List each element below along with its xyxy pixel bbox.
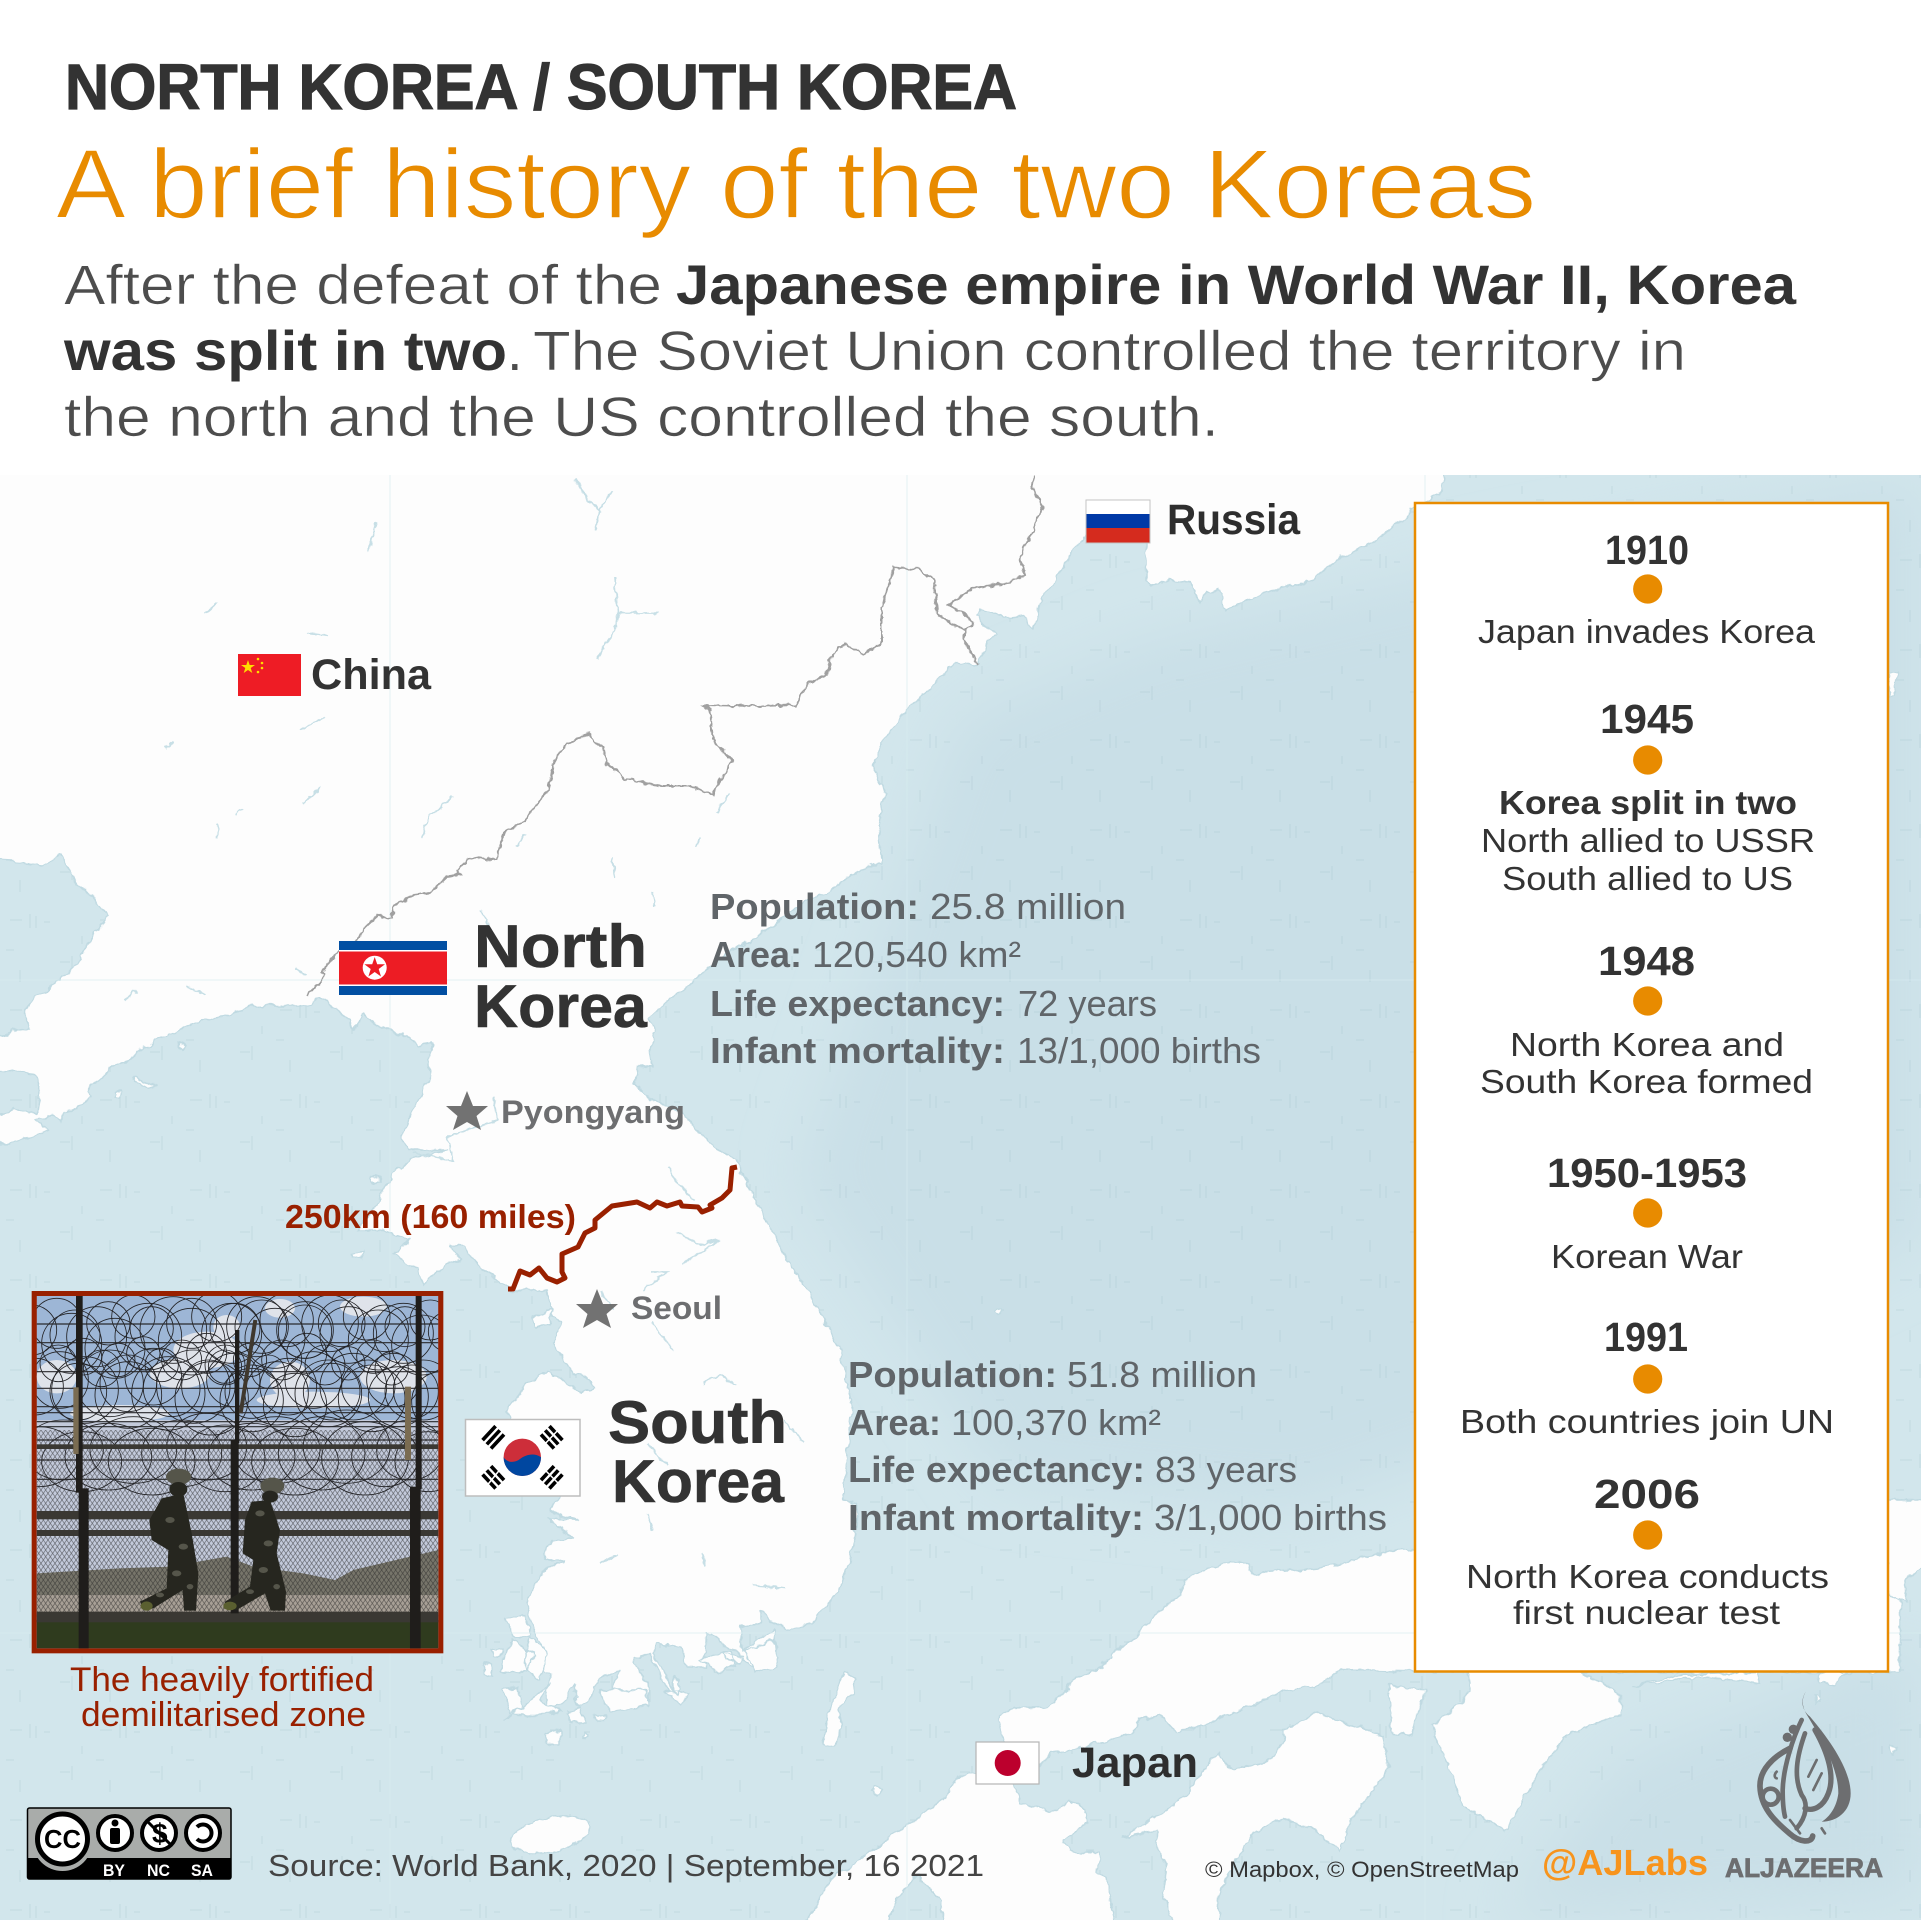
North Korea label group (339, 913, 648, 1040)
sea (0, 475, 1921, 1920)
event: 1948 (1480, 938, 1813, 1100)
North Korea statistics: Area: (710, 934, 802, 975)
event: 1945: North allied to USSR (1481, 822, 1815, 859)
event: 1945: South allied to US (1502, 860, 1793, 897)
icon: Al Jazeera emblem (1760, 1691, 1851, 1841)
South Korea statistics (848, 1354, 1387, 1538)
label: South Korea (608, 1389, 787, 1515)
South Korea statistics: Population: (848, 1354, 1057, 1395)
event: 1910: 1910 (1605, 527, 1689, 573)
panel: timeline (1415, 503, 1888, 1672)
label: North Korea (474, 913, 648, 1040)
land: Tsushima (823, 1672, 855, 1747)
label: Russia: Russia (1167, 496, 1301, 544)
icon: Creative Commons badge: NC (147, 1861, 170, 1880)
South Korea statistics: Infant mortality: (848, 1497, 1144, 1538)
event: 1950-1953 (1547, 1150, 1747, 1275)
line: demilitarised zone (508, 1167, 737, 1289)
icon: star (576, 1289, 618, 1328)
intro paragraph: the north and the US controlled the south. (64, 385, 1219, 448)
label: Japan: Japan (1072, 1739, 1198, 1787)
land masses (0, 460, 1921, 1920)
event: 2006: 2006 (1594, 1471, 1700, 1517)
South Korea statistics: Life expectancy: (848, 1449, 1145, 1490)
label: China: China (311, 651, 432, 699)
South Korea statistics: 3/1,000 births (1154, 1497, 1387, 1538)
icon: Creative Commons badge: BY (103, 1861, 126, 1880)
event: 1948: 1948 (1598, 938, 1695, 984)
North Korea statistics: Population: (710, 886, 919, 927)
event: 1991: 1991 (1604, 1314, 1688, 1360)
event: 2006: North Korea conducts (1466, 1558, 1829, 1595)
deep sea shading (852, 620, 1414, 1466)
figure: first soldier (140, 1469, 198, 1611)
land: Kii island edges and right strip (1389, 672, 1921, 1735)
intro paragraph: The Soviet Union controlled the territory in (533, 319, 1686, 382)
label: Pyongyang: Pyongyang (501, 1094, 685, 1130)
Japan flag and label (976, 1739, 1198, 1787)
DMZ line and length (285, 1167, 737, 1289)
event: 1950-1953: Korean War (1551, 1238, 1743, 1275)
header: title and introduction (56, 51, 1797, 448)
event: 2006 (1466, 1471, 1829, 1631)
intro paragraph: was split in two (63, 319, 507, 382)
North Korea statistics: 13/1,000 births (1017, 1030, 1261, 1071)
land: mainland Asia and Korean peninsula (0, 460, 1448, 1710)
icon: Creative Commons badge: CC (44, 1824, 81, 1854)
photo caption: demilitarised zone (81, 1696, 366, 1734)
label: South Korea: South (608, 1389, 787, 1456)
event: 1950-1953: 1950-1953 (1547, 1150, 1747, 1196)
event: 1945 (1481, 696, 1815, 897)
land: Japan, Honshu (998, 1500, 1900, 1830)
South Korea statistics: 100,370 km² (951, 1402, 1161, 1443)
land: Japan, Shikoku (1122, 1713, 1389, 1920)
event: 1945: 1945 (1600, 696, 1694, 742)
South Korea label group (466, 1389, 787, 1515)
photo caption (70, 1661, 374, 1734)
land: Japan, Kyushu (796, 1772, 1117, 1920)
Russia flag and label (1086, 496, 1301, 544)
event: 1948: South Korea formed (1480, 1063, 1813, 1100)
event: 1948: North Korea and (1510, 1026, 1784, 1063)
event: 1910 (1478, 527, 1816, 650)
border: China and Russia (949, 476, 1043, 630)
land: Jeju island (510, 1815, 590, 1854)
label: Seoul: Seoul (631, 1290, 722, 1326)
map attribution: © Mapbox, © OpenStreetMap (1205, 1857, 1519, 1882)
national borders (308, 476, 1043, 997)
Pyongyang marker (446, 1091, 685, 1130)
figure: second soldier (223, 1478, 286, 1611)
source line: Source: World Bank, 2020 | September, 16 2021 (268, 1848, 984, 1883)
label: North Korea: North (474, 913, 647, 980)
sea texture (0, 475, 1921, 1920)
photo caption: The heavily fortified (70, 1661, 374, 1699)
wordmark: Al Jazeera: ALJAZEERA (1725, 1853, 1883, 1883)
South Korea statistics: 51.8 million (1067, 1354, 1257, 1395)
North Korea statistics: Infant mortality: (710, 1030, 1005, 1071)
icon: star (446, 1091, 488, 1130)
deep sea shading, pacific (1600, 1704, 1884, 1874)
flag: South Korea (466, 1420, 580, 1496)
title: kicker: NORTH KOREA / SOUTH KOREA (65, 51, 1017, 123)
North Korea statistics (710, 886, 1261, 1071)
title: main headline: A brief history of the two Koreas (56, 129, 1536, 239)
intro paragraph: After the defeat of the (64, 253, 662, 316)
flag: North Korea (339, 941, 447, 995)
label: North Korea: Korea (474, 973, 648, 1040)
North Korea statistics: 72 years (1018, 983, 1157, 1024)
China flag and label (238, 651, 432, 699)
event: 1991: Both countries join UN (1460, 1403, 1834, 1440)
land: scattered small islands (113, 1043, 1898, 1796)
North Korea statistics: Life expectancy: (710, 983, 1005, 1024)
land: southwest Korean islands (483, 1615, 777, 1745)
Seoul marker (576, 1289, 722, 1328)
graticule lines (0, 475, 1921, 1920)
border: North Korea with China and Russia (308, 567, 978, 997)
flag: Japan (976, 1742, 1039, 1784)
logo: Al Jazeera (1725, 1691, 1883, 1883)
social handle: @AJLabs (1542, 1842, 1708, 1883)
event: 1991 (1460, 1314, 1834, 1440)
icon: Creative Commons badge (28, 1808, 231, 1880)
flag: China (238, 654, 301, 696)
event: 2006: first nuclear test (1513, 1594, 1780, 1631)
event: 1910: Japan invades Korea (1478, 613, 1816, 650)
intro paragraph: Japanese empire in World War II, Korea (676, 253, 1797, 316)
North Korea statistics: 120,540 km² (812, 934, 1021, 975)
rivers and lakes (125, 478, 805, 1588)
icon: Creative Commons badge: SA (191, 1861, 213, 1880)
intro paragraph (63, 253, 1797, 448)
label: DMZ length: 250km (160 miles) (285, 1198, 576, 1235)
intro paragraph: . (507, 319, 523, 382)
map background (0, 460, 1921, 1920)
North Korea statistics: 25.8 million (930, 886, 1126, 927)
South Korea statistics: 83 years (1155, 1449, 1297, 1490)
event: 1945: Korea split in two (1499, 784, 1797, 821)
icon: Creative Commons badge: $ (152, 1818, 168, 1849)
photo: soldiers patrolling the fence (0, 1291, 472, 1653)
label: South Korea: Korea (612, 1448, 785, 1515)
South Korea statistics: Area: (848, 1402, 941, 1443)
flag: Russia (1086, 500, 1150, 543)
